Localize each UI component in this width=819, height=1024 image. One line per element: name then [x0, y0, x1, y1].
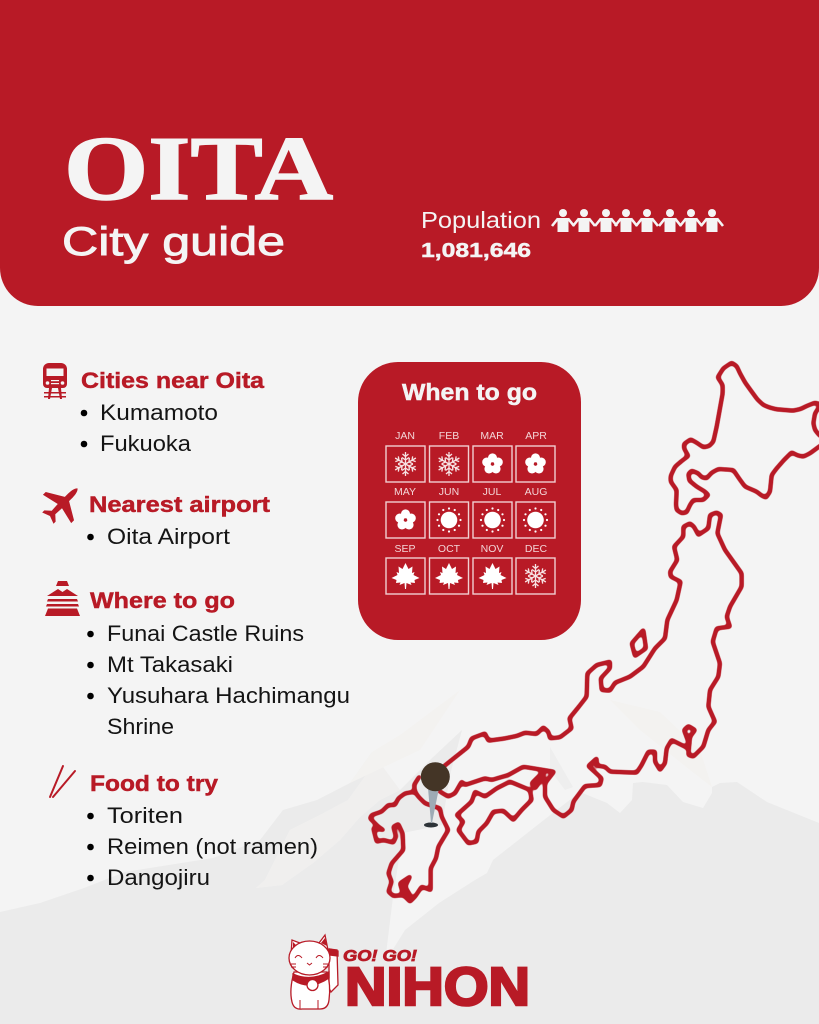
month MAR: MAR	[480, 430, 504, 442]
wordmark large: NIHON	[345, 957, 530, 1017]
list: Kumamoto	[100, 400, 218, 425]
list: Oita Airport	[107, 524, 230, 549]
month DEC	[516, 543, 555, 594]
Honshu	[433, 512, 742, 817]
section: cities near Oita	[43, 363, 265, 456]
icon: row of people	[552, 209, 723, 232]
Sado	[632, 630, 646, 656]
month NOV	[473, 543, 512, 594]
month AUG	[516, 486, 555, 538]
month APR: APR	[525, 430, 547, 442]
population value: 1,081,646	[421, 240, 531, 262]
month MAY: MAY	[394, 486, 416, 498]
month JUN	[430, 486, 468, 538]
panel: when to go	[358, 362, 581, 640]
heading: Cities near Oita	[81, 368, 265, 393]
list: Toriten	[107, 803, 183, 828]
month JUL: JUL	[483, 486, 501, 498]
list: Funai Castle Ruins	[107, 621, 304, 646]
list	[87, 803, 318, 890]
month OCT: OCT	[438, 543, 461, 555]
month JAN	[386, 430, 425, 482]
subtitle: City guide	[62, 220, 285, 264]
Hokkaido	[671, 363, 819, 513]
icon: lucky cat	[289, 935, 338, 1009]
month MAY	[386, 486, 425, 538]
map of Japan	[370, 363, 819, 902]
population block	[421, 207, 723, 262]
list: Fukuoka	[100, 431, 192, 456]
heading: Nearest airport	[89, 492, 271, 517]
population label: Population	[421, 207, 541, 233]
month JUN: JUN	[439, 486, 459, 498]
section: nearest airport	[34, 474, 271, 549]
icon: chopsticks	[50, 766, 75, 797]
header banner	[0, 0, 819, 306]
month MAR	[473, 430, 512, 482]
list	[87, 621, 350, 739]
title: OITA	[64, 118, 333, 219]
month APR	[516, 430, 555, 482]
Shikoku	[457, 782, 532, 843]
month SEP: SEP	[394, 543, 416, 555]
list: Dangojiru	[107, 865, 210, 890]
month FEB: FEB	[439, 430, 459, 442]
heading: Where to go	[90, 588, 235, 613]
map pin	[421, 762, 450, 828]
icon: castle	[45, 581, 80, 616]
month JAN: JAN	[395, 430, 415, 442]
Honshu, Shikoku, Kyushu and islands	[370, 512, 742, 902]
heading: Food to try	[90, 771, 219, 796]
background mountain	[0, 690, 819, 1024]
icon: plane	[34, 474, 92, 532]
month OCT	[430, 543, 468, 594]
month JUL	[473, 486, 512, 538]
list: Mt Takasaki	[107, 652, 233, 677]
heading: When to go	[402, 379, 537, 405]
list: Shrine	[107, 714, 174, 739]
section: food to try	[50, 766, 318, 890]
month NOV: NOV	[481, 543, 503, 555]
list: Reimen (not ramen)	[107, 834, 318, 859]
wordmark small: GO! GO!	[343, 948, 418, 965]
icon: train	[43, 363, 67, 399]
month SEP	[386, 543, 425, 594]
logo: Go! Go! Nihon	[289, 935, 530, 1017]
list	[81, 400, 218, 456]
month DEC: DEC	[525, 543, 548, 555]
Awaji	[532, 772, 543, 788]
list: Yusuhara Hachimangu	[107, 683, 350, 708]
month FEB	[430, 430, 468, 482]
section: where to go	[45, 581, 350, 739]
Kyushu	[370, 777, 448, 902]
month AUG: AUG	[525, 486, 547, 498]
